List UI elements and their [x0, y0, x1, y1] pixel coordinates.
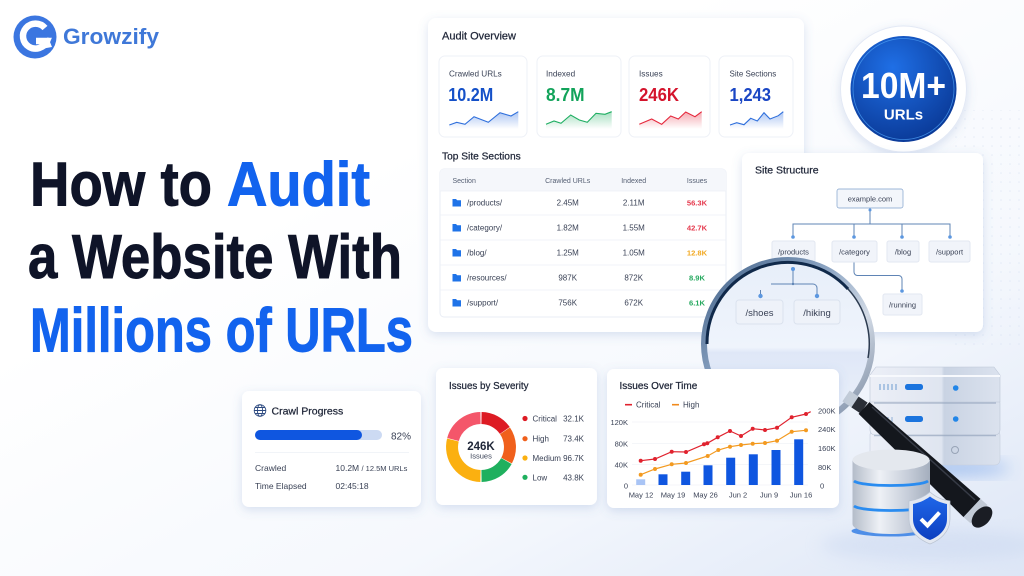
x axis labels: Jun 9	[760, 490, 778, 500]
row: products: 2.11M	[623, 198, 645, 208]
row: support: 672K	[624, 298, 644, 308]
node: products	[772, 241, 815, 262]
icon: database	[852, 450, 930, 536]
KPI card: indexed: Indexed	[546, 70, 576, 78]
KPI card: site sections	[719, 56, 793, 137]
row: resources: 987K	[558, 274, 578, 282]
row: blog: 1.25M	[557, 248, 579, 258]
heading: top site sections: Top Site Sections	[442, 152, 521, 162]
badge: 10M+ URLs	[840, 26, 966, 152]
legend: severity: 32.1K	[563, 414, 585, 424]
row: blog: 1.05M	[623, 248, 645, 258]
donut chart: 246K	[467, 441, 495, 453]
legend: severity: 96.7K	[563, 454, 585, 463]
right axis: 240K	[818, 425, 836, 434]
node: category: /category	[839, 248, 870, 256]
row: products: 2.45M	[557, 198, 579, 208]
legend: severity: Low	[532, 473, 547, 482]
title: Audit	[227, 150, 370, 220]
donut chart	[452, 418, 510, 476]
table header: Indexed	[621, 178, 646, 185]
title	[28, 150, 413, 366]
right axis: 200K	[818, 406, 836, 416]
icon: globe	[254, 405, 266, 416]
node: products: /products	[778, 248, 809, 256]
panel: site structure	[742, 153, 983, 332]
badge: 10M+ URLs: URLs	[884, 106, 923, 124]
KPI card: issues: Issues	[639, 70, 663, 78]
row: support: 756K	[558, 298, 578, 308]
KPI card: indexed	[537, 56, 621, 137]
row: resources: 8.9K	[689, 274, 706, 282]
lens	[704, 260, 872, 428]
table header: Crawled URLs	[545, 178, 591, 185]
row: category: /category/	[467, 224, 503, 232]
x axis labels: May 12	[629, 490, 653, 500]
donut chart: Issues	[470, 452, 492, 460]
row: support: /support/	[467, 298, 499, 308]
row: blog	[452, 248, 708, 258]
row: category: 1.82M	[557, 224, 579, 232]
row: resources: /resources/	[467, 274, 507, 282]
right axis	[818, 406, 836, 490]
node: shoes: /shoes	[746, 308, 774, 319]
bar series	[636, 439, 803, 485]
KPI card: issues	[629, 56, 710, 137]
panel: crawl progress	[242, 391, 421, 507]
crawl stats: 02:45:18	[336, 481, 369, 491]
node: hiking: /hiking	[803, 308, 831, 319]
row: products: /products/	[467, 198, 503, 208]
badge: 10M+ URLs: 10M+	[861, 65, 946, 106]
KPI card: crawled URLs	[439, 56, 527, 137]
logo: Growzify	[14, 16, 160, 58]
panel: audit overview	[428, 18, 804, 332]
crawl stats: Time Elapsed	[255, 481, 307, 491]
legend: severity	[522, 414, 585, 482]
row: resources	[452, 274, 706, 282]
progress bar: 82%	[391, 432, 411, 442]
row: products	[452, 198, 708, 208]
KPI card: site sections: Site Sections	[730, 70, 776, 78]
table header: Issues	[687, 178, 708, 185]
x axis labels: Jun 2	[729, 490, 747, 500]
panel: issues over time	[607, 369, 839, 508]
node: blog: /blog	[895, 248, 911, 256]
row: support: 6.1K	[689, 298, 706, 308]
KPI card: crawled URLs: 10.2M	[448, 84, 493, 105]
title: How to	[30, 150, 212, 220]
icon: magnifying glass	[704, 260, 996, 532]
legend: severity: Medium	[532, 454, 561, 463]
row: support	[452, 298, 706, 308]
node: support	[929, 241, 970, 262]
right axis: 160K	[818, 444, 836, 453]
row: products: 56.3K	[687, 198, 708, 208]
KPI card: crawled URLs: Crawled URLs	[449, 70, 502, 78]
row: resources: 872K	[624, 274, 644, 282]
right axis: 80K	[818, 463, 831, 472]
crawl stats	[255, 463, 408, 491]
KPI card: indexed: 8.7M	[546, 84, 584, 105]
row: blog: /blog/	[467, 248, 487, 258]
table: top site sections	[440, 169, 726, 317]
icon: G arrow mark	[14, 16, 56, 58]
legend: severity: Critical	[532, 414, 557, 424]
tree connectors	[791, 208, 952, 293]
left axis: 0	[624, 482, 628, 490]
progress bar	[255, 430, 411, 442]
legend: severity: High	[532, 435, 549, 444]
left axis	[610, 418, 628, 490]
panel: issues by severity	[436, 368, 597, 505]
row: category	[452, 224, 708, 232]
right axis: 0	[820, 482, 824, 490]
legend: severity: 73.4K	[563, 435, 585, 444]
KPI card: site sections: 1,243	[730, 84, 771, 105]
icon: server stack	[870, 367, 1010, 476]
KPI card: issues: 246K	[639, 84, 680, 105]
row: category: 42.7K	[687, 224, 708, 232]
node: category	[832, 241, 877, 262]
node: example.com: example.com	[848, 194, 892, 204]
legend: trend lines: High	[683, 400, 699, 410]
x axis labels	[629, 490, 812, 500]
brand name: Growzify	[63, 24, 160, 49]
legend: trend lines	[625, 400, 699, 410]
table header: Section	[452, 178, 476, 185]
left axis: 80K	[615, 440, 628, 448]
row: blog: 12.8K	[687, 248, 708, 258]
heading: audit overview: Audit Overview	[442, 30, 516, 42]
line series: critical	[639, 412, 811, 463]
legend: trend lines: Critical	[636, 400, 661, 410]
heading: crawl progress: Crawl Progress	[272, 406, 343, 418]
title: Millions of URLs	[30, 296, 413, 366]
icon: security shield	[909, 492, 950, 544]
line series: high	[639, 428, 808, 477]
left axis: 120K	[610, 418, 628, 427]
heading: issues by severity: Issues by Severity	[449, 381, 529, 392]
x axis labels: May 19	[661, 490, 685, 500]
node: running	[883, 294, 922, 315]
node: support: /support	[936, 248, 964, 256]
node: blog	[887, 241, 919, 262]
node: running: /running	[889, 300, 916, 310]
node: example.com	[837, 189, 903, 208]
legend: severity: 43.8K	[563, 473, 585, 482]
x axis labels: May 26	[693, 490, 718, 500]
table header	[452, 178, 708, 185]
left axis: 40K	[615, 460, 628, 470]
crawl stats: Crawled	[255, 463, 286, 473]
heading: site structure: Site Structure	[755, 164, 819, 176]
title: a Website With	[28, 223, 402, 292]
heading: issues over time: Issues Over Time	[620, 381, 698, 392]
handle	[846, 396, 996, 532]
row: category: 1.55M	[623, 224, 645, 232]
x axis labels: Jun 16	[790, 490, 812, 500]
crawl stats: 10.2M / 12.5M URLs	[336, 463, 408, 473]
